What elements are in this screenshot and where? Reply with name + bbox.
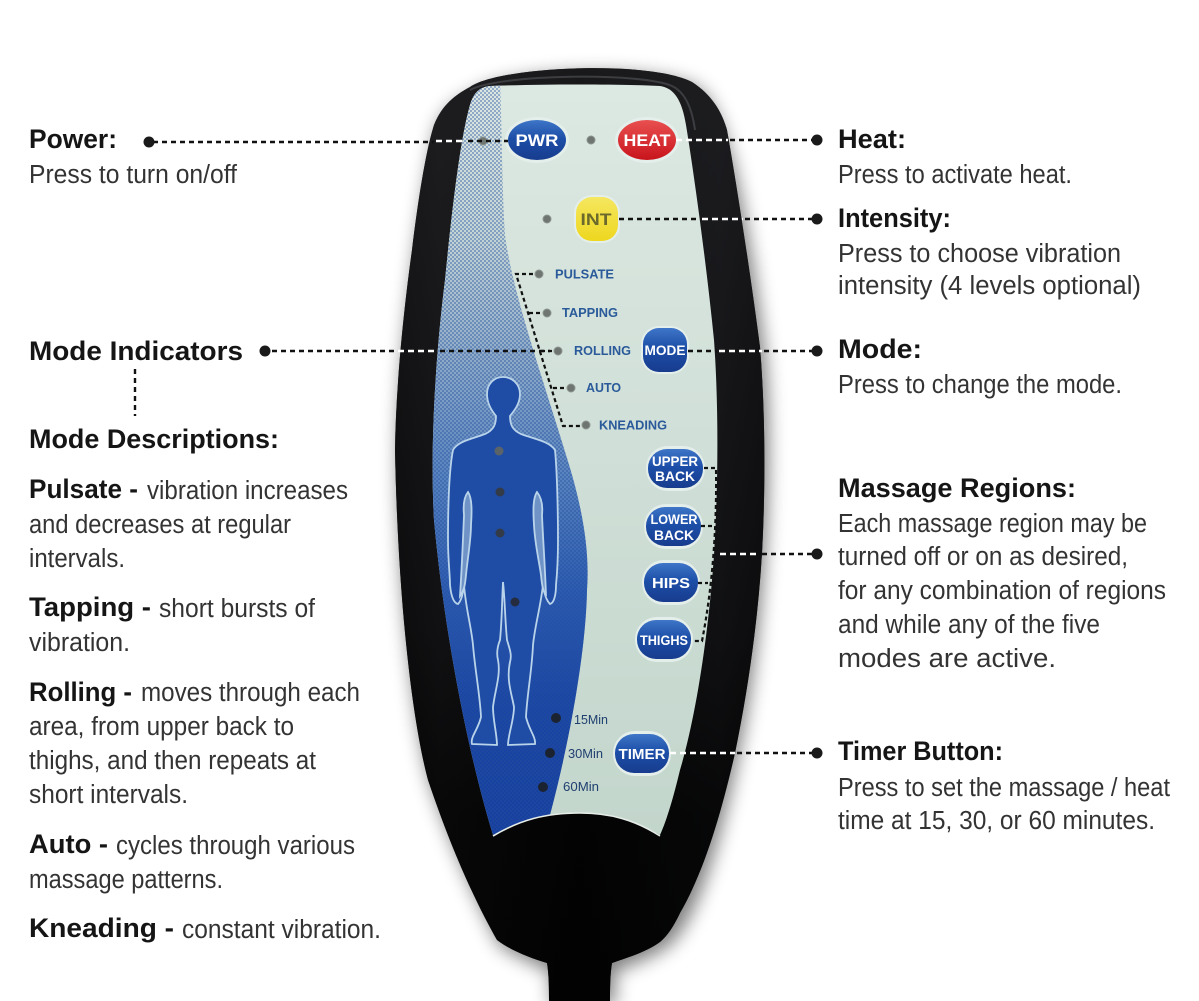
description: rolling (29, 677, 360, 809)
description: pulsate: vibration increases (147, 477, 348, 505)
left arm gap (460, 492, 472, 596)
TIMER button (613, 731, 671, 776)
TIMER button: TIMER (618, 747, 666, 763)
THIGHS button: THIGHS (640, 632, 688, 648)
description: pulsate: intervals. (29, 545, 125, 573)
description: auto: Auto - (29, 829, 108, 859)
description: rolling: moves through each (141, 679, 360, 707)
UPPER BACK button (646, 446, 705, 491)
description: tapping (29, 592, 316, 657)
callout: timer button: Press to set the massage / heat (838, 774, 1170, 802)
LOWER BACK button (644, 504, 703, 549)
INT button (574, 195, 620, 243)
callout: heat: Press to activate heat. (838, 161, 1072, 189)
HIPS button: HIPS (652, 575, 690, 592)
callout: massage regions: Massage Regions: (838, 473, 1076, 503)
callout: mode: Mode: (838, 334, 922, 364)
callout: timer button (838, 736, 1170, 835)
PWR button (505, 117, 569, 163)
figure silhouette (448, 377, 558, 745)
callout: massage regions: modes are active. (838, 645, 1056, 673)
description: kneading: constant vibration. (182, 916, 381, 944)
callout: intensity: Press to choose vibration (838, 240, 1121, 268)
timer labels: 30Min (568, 747, 603, 761)
panel rim (470, 77, 695, 130)
description: rolling: thighs, and then repeats at (29, 747, 316, 775)
MODE button (641, 326, 689, 374)
UPPER BACK button: BACK (655, 468, 695, 484)
description: auto (29, 829, 355, 894)
face panel (433, 84, 717, 835)
callout: power: Power: (29, 124, 117, 154)
heading: mode descriptions: Mode Descriptions: (29, 424, 279, 454)
callout: massage regions: turned off or on as desired, (838, 543, 1128, 571)
UPPER BACK button: UPPER (652, 453, 698, 469)
callout: intensity: Intensity: (838, 203, 951, 233)
leader lines (135, 140, 812, 753)
description: kneading (29, 913, 381, 944)
INT button: INT (580, 210, 612, 229)
PWR button: PWR (516, 131, 558, 150)
description: pulsate: Pulsate - (29, 474, 138, 504)
HEAT button: HEAT (624, 131, 671, 150)
LOWER BACK button: LOWER (650, 511, 698, 527)
description: rolling: area, from upper back to (29, 713, 294, 741)
timer labels (563, 713, 608, 794)
callout: power: Press to turn on/off (29, 161, 238, 189)
LED lights (479, 136, 595, 429)
timer labels: 15Min (574, 713, 608, 727)
halftone blue area (420, 80, 588, 850)
callout: massage regions: Each massage region may be (838, 510, 1147, 538)
description: auto: massage patterns. (29, 866, 223, 894)
description: rolling: short intervals. (29, 781, 188, 809)
callout: power (29, 124, 238, 189)
description: auto: cycles through various (116, 832, 355, 860)
MODE button: MODE (644, 342, 686, 358)
human figure (448, 377, 558, 745)
callout: heat (838, 124, 1072, 189)
callout: timer button: Timer Button: (838, 736, 1003, 766)
callout: intensity (838, 203, 1141, 300)
description: tapping: vibration. (29, 629, 130, 657)
heading: mode indicators: Mode Indicators (29, 336, 243, 366)
connector bullets (144, 134, 822, 758)
callout: massage regions (838, 473, 1166, 673)
description: rolling: Rolling - (29, 677, 132, 707)
THIGHS button (635, 617, 693, 662)
timer indicator lights (538, 713, 561, 792)
bottom arc highlight (493, 813, 660, 836)
description: kneading: Kneading - (29, 913, 174, 943)
lower body shading (395, 68, 764, 1001)
LOWER BACK button: BACK (654, 527, 694, 543)
callout: heat: Heat: (838, 124, 906, 154)
callout: massage regions: for any combination of regions (838, 577, 1166, 605)
mode labels: TAPPING (562, 306, 618, 320)
description: tapping: short bursts of (159, 595, 316, 623)
callout: intensity: intensity (4 levels optional) (838, 272, 1141, 300)
callout: mode: Press to change the mode. (838, 371, 1122, 399)
remote body (395, 68, 764, 1001)
mode labels (555, 268, 667, 432)
callout: mode (838, 334, 1122, 399)
mode labels: AUTO (586, 381, 621, 395)
remote control (395, 68, 769, 1001)
callout: massage regions: and while any of the five (838, 611, 1100, 639)
mode labels: ROLLING (574, 344, 631, 358)
description: pulsate (29, 474, 348, 573)
right arm gap (533, 492, 546, 596)
mode labels: PULSATE (555, 268, 614, 282)
HIPS button (642, 560, 700, 605)
description: tapping: Tapping - (29, 592, 151, 622)
description: pulsate: and decreases at regular (29, 511, 291, 539)
remote shadow (398, 73, 769, 1001)
body indicator lights (494, 446, 520, 606)
callout: timer button: time at 15, 30, or 60 minutes. (838, 807, 1155, 835)
timer labels: 60Min (563, 780, 599, 794)
HEAT button (615, 117, 679, 163)
mode labels: KNEADING (599, 418, 667, 432)
